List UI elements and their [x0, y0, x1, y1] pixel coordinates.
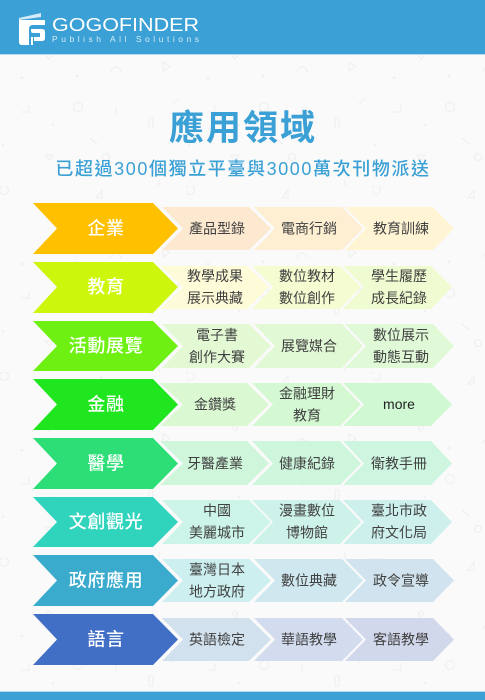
row: 政府應用: 數位典藏: [281, 572, 337, 588]
row: 政府應用: 地方政府: [189, 584, 245, 600]
row: 教育: [33, 262, 452, 313]
row: 醫學: 醫學: [87, 454, 125, 474]
row: 教育: 成長紀錄: [371, 290, 427, 306]
row: 政府應用: 臺灣日本: [189, 562, 245, 578]
row: 教育: 數位教材: [279, 268, 335, 284]
row: 語言: 英語檢定: [189, 632, 245, 648]
row: 企業: 電商行銷: [281, 220, 337, 236]
footer bar: [0, 691, 485, 700]
row: 文創觀光: 美麗城市: [189, 524, 245, 540]
row: 醫學: 健康紀錄: [279, 456, 335, 472]
row: 金融: 金鑽獎: [194, 396, 236, 412]
row: 政府應用: 政令宣導: [373, 572, 429, 588]
row: 醫學: 衛教手冊: [371, 456, 427, 472]
row: 活動展覽: 展覽媒合: [281, 338, 337, 354]
row: 語言: [33, 614, 454, 665]
subtitle: 已超過300個獨立平臺與3000萬次刊物派送: [55, 159, 431, 179]
row: 金融: 金融理財: [279, 386, 335, 402]
row: 教育: 教學成果: [187, 268, 243, 284]
row: 金融: [33, 379, 452, 430]
row: 文創觀光: 臺北市政: [371, 502, 427, 518]
row: 金融: 金融: [87, 394, 125, 414]
row: 企業: [33, 203, 454, 254]
row: 語言: 語言: [87, 630, 125, 650]
row: 語言: 客語教學: [373, 632, 429, 648]
row: 教育: 展示典藏: [187, 290, 243, 306]
row: 活動展覽: 活動展覽: [69, 336, 143, 356]
row: 文創觀光: [33, 497, 452, 547]
row: 金融: more: [383, 396, 415, 412]
row: 企業: 企業: [87, 218, 125, 238]
row: 活動展覽: [33, 321, 454, 371]
row: 文創觀光: 漫畫數位: [279, 502, 335, 518]
icon: book logo: [19, 13, 45, 45]
row: 企業: 產品型錄: [189, 220, 245, 236]
row: 語言: 華語教學: [281, 632, 337, 648]
logo tagline: Publish All Solutions: [52, 34, 199, 44]
row: 政府應用: [33, 555, 454, 606]
row: 政府應用: 政府應用: [69, 570, 143, 590]
row: 活動展覽: 創作大賽: [189, 349, 245, 365]
row: 文創觀光: 文創觀光: [69, 512, 143, 532]
row: 活動展覽: 電子書: [196, 327, 238, 343]
row: 教育: 教育: [87, 276, 125, 297]
row: 文創觀光: 博物館: [286, 524, 328, 540]
row: 醫學: 牙醫產業: [187, 456, 243, 472]
row: 醫學: [33, 438, 452, 489]
row: 金融: 教育: [293, 408, 321, 424]
row: 教育: 學生履歷: [371, 268, 427, 284]
row: 活動展覽: 數位展示: [373, 327, 429, 343]
title: 應用領域: [169, 109, 317, 148]
header bar: [0, 0, 485, 55]
row: 文創觀光: 府文化局: [371, 524, 427, 540]
logo wordmark: GOGOFINDER: [52, 15, 199, 35]
row: 企業: 教育訓練: [373, 220, 429, 236]
row: 活動展覽: 動態互動: [373, 349, 429, 365]
row: 文創觀光: 中國: [203, 502, 231, 518]
row: 教育: 數位創作: [279, 290, 335, 306]
